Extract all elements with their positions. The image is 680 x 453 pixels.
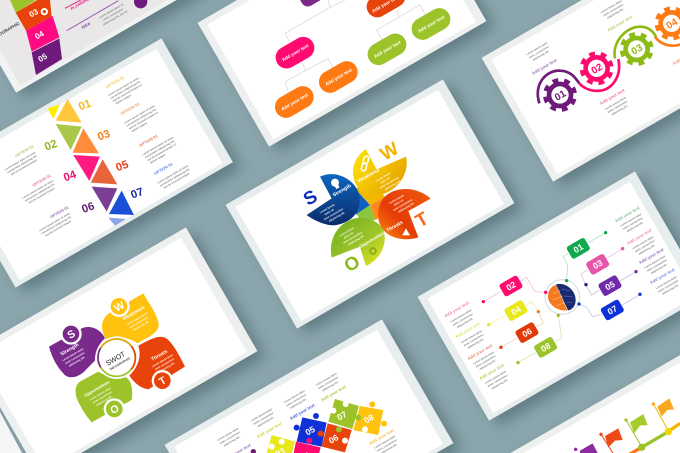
triangles chart: sed do eiusmod tempor [28,186,55,205]
SWOT four-lobe chart: Lorem ipsum dolor [61,347,84,362]
triangles chart: sed do eiusmod tempor ut [128,110,159,131]
org chart: Add your text [280,92,309,112]
center circle: INFOGRAPHIC [109,356,132,371]
lobe: weakness [102,293,159,343]
gears chain: Add your text [531,57,558,76]
SWOT four-lobe chart: amet consectetur [92,390,113,404]
panel: brain mind-map slide [418,169,680,429]
triangles chart: Lorem ipsum dolor sit amet, [21,178,54,200]
brain mind map: Add your text [626,227,653,246]
brain mind map: Lorem ipsum dolor [484,369,507,385]
badge W: W [112,299,128,315]
SWOT flower chart: amet consectetur [392,197,413,212]
triangles chart [4,74,193,239]
triangles chart: OPTION 03 [120,101,141,116]
panel: flags timeline slide [506,328,680,453]
brain mind map: Add your text [467,343,494,361]
letter O: O [340,251,363,276]
puzzle chart: 08 [362,412,376,425]
org chart: Add your text [281,43,310,62]
SWOT four-lobe chart: adipiscing elit, [157,361,176,374]
brain mind map: adipiscing elit, [491,378,509,390]
gears chain: amet, consectetur [607,99,628,114]
SWOT flower chart: Lorem ipsum [319,202,336,214]
ribbon graphic: Lorem ipsum dolor sit [98,2,124,20]
SWOT four-lobe chart: Weakness [122,305,146,322]
panel: center SWOT flower slide [226,77,523,337]
brain mind map: Add your text [443,300,470,318]
puzzle chart: Lorem ipsum dolor [373,434,396,450]
SWOT flower chart: amet consectetur [323,207,344,221]
brain mind map: amet, consectetur [463,332,484,347]
ribbon graphic: amet, consectetur [102,7,124,22]
triangles chart: Lorem ipsum dolor sit amet, [4,150,37,171]
SWOT four-lobe chart: amet consectetur [128,315,149,329]
icon: opportunity circle [370,248,376,254]
triangles chart: Lorem ipsum dolor sit amet, [141,135,174,156]
brain mind map: Lorem ipsum dolor [643,254,666,270]
triangles chart: sed do eiusmod tempor ut [112,83,143,103]
badge 06 [515,321,539,344]
triangles chart: sed do eiusmod tempor ut [146,142,177,162]
brain mind map: Lorem ipsum dolor [631,235,654,250]
SWOT four-lobe chart: Lorem ipsum dolor [151,353,174,368]
gears chain: adipiscing elit, [532,49,550,62]
puzzle chart: adipiscing elit, [223,435,241,447]
triangles chart: Lorem ipsum dolor sit amet, [107,76,140,97]
brain mind map: Lorem ipsum dolor [449,308,472,324]
SWOT flower chart: dolor sit [324,208,335,216]
badge 08 [533,336,558,359]
brain mind map: adipiscing elit, [661,283,679,296]
triangles chart: dolore magna [115,93,132,105]
badge 03 [585,253,610,276]
brain mind map [443,205,680,392]
flag orange [657,398,674,417]
SWOT flower chart: adipiscing elit [347,234,365,246]
panel: triangles options slide [0,36,242,296]
triangles chart: OPTION 01 [153,161,174,176]
petal: strength [307,174,360,225]
flag green [630,414,648,433]
petal: threats [378,189,431,239]
badge 05 [598,274,622,297]
gear 03 [616,29,657,69]
triangles chart: OPTION 01 [31,173,53,188]
SWOT flower chart: dolor sit [393,198,404,207]
gears chain: adipiscing elit, [606,7,624,20]
badge T: T [157,374,169,388]
panel: org chart slide [198,0,495,155]
brain mind map: amet, consectetur [634,239,656,253]
brain mind map: amet, consectetur [452,312,474,327]
triangles chart: OPTION 01 [14,143,35,158]
brain mind map: Add your text [614,205,641,224]
triangles chart: consectetur adipiscing elit, [24,182,56,203]
triangles chart: dolore magna [131,121,148,133]
triangles chart: OPTION 01 [105,74,126,89]
gears chain: Lorem ipsum dolor [525,41,548,56]
brain mind map: Lorem ipsum dolor [460,329,483,344]
org chart: Add your text [417,14,446,34]
gears chain: adipiscing elit, [610,104,629,116]
SWOT four-lobe chart: adipiscing elit, [68,355,86,368]
brain mind map: Add your text [478,362,505,381]
gears chain: amet, consectetur [528,45,550,59]
puzzle chart: adipiscing elit, [321,380,339,392]
badge 01 [566,237,591,260]
lobe: threats [129,337,185,389]
gear 02 [576,48,617,89]
badge 07: 07 [606,303,619,317]
SWOT four-lobe chart: Opportunities [83,379,111,398]
puzzle chart: amet, consectetur [253,411,274,426]
brain mind map: amet, consectetur [657,279,679,293]
brain mind map: adipiscing elit, [479,358,497,371]
puzzle chart: adipiscing elit, [256,415,275,428]
brain mind map: adipiscing elit, [650,262,668,275]
letter S: S [299,185,321,210]
puzzle chart: amet, consectetur [376,438,398,453]
org chart: Add your text [373,39,402,59]
gears chain: Lorem ipsum dolor [600,0,623,14]
puzzle chart: Lorem ipsum dolor [216,426,239,442]
SWOT flower chart: amet consectetur [379,175,400,190]
panel: SWOT infographic slide [0,225,266,453]
flag purple [580,443,598,453]
triangles chart: Lorem ipsum dolor sit amet, [38,211,71,232]
brain mind map: Lorem ipsum dolor [619,212,642,228]
brain mind map: amet, consectetur [475,354,496,369]
org chart [271,0,454,122]
SWOT four-lobe chart: Lorem ipsum dolor [89,386,112,402]
SWOT flower chart: adipiscing elit [397,201,415,214]
brain mind map: Add your text [454,321,481,339]
puzzle chart: Add your text [289,402,316,421]
brain mind map: adipiscing elit, [467,337,485,350]
SWOT flower chart: adipiscing elit [328,211,345,223]
SWOT flower chart: amet consectetur [342,230,363,245]
puzzle chart: Add your text [368,427,395,446]
triangles chart: consectetur adipiscing elit, [144,139,176,159]
triangles chart: 05 [114,159,130,174]
lobe: strength [49,327,105,377]
brain mind map: adipiscing elit, [456,316,474,329]
SWOT four-lobe chart: amet consectetur [64,351,85,365]
badge 01: 01 [572,241,585,255]
triangles chart: OPTION 01 [49,204,70,219]
SWOT flower chart: Lorem ipsum [388,193,405,205]
brain mind map: amet, consectetur [622,216,644,231]
triangles chart: 03 [96,128,112,144]
ribbon graphic: 05 [37,51,49,64]
puzzle chart: Add your text [256,421,283,439]
letter T: T [412,207,432,231]
gear 01: 01 [553,88,569,104]
triangles chart: consectetur adipiscing elit, [40,215,72,235]
SWOT flower chart: Threats [386,220,404,234]
triangles chart: 04 [62,168,79,184]
SWOT flower chart: Opportunities [358,230,386,249]
gear 04: 04 [665,17,680,32]
puzzle chart: Add your text [320,384,347,403]
badge 04: 04 [509,304,523,317]
SWOT flower chart: adipiscing elit [384,179,401,191]
puzzle chart: Lorem ipsum dolor [315,371,338,387]
gear 02: 02 [590,62,605,77]
gears chain [525,0,680,118]
panel: ribbon infographic slide [0,0,242,101]
gear 04 [651,3,680,44]
SWOT four-lobe chart: Threats [150,349,169,363]
SWOT flower chart: Strength [332,183,353,199]
badge 08: 08 [539,340,552,354]
petal: opportunities [331,218,385,266]
triangles chart: consectetur adipiscing elit, [125,107,157,128]
icon: warning triangle [402,228,410,235]
puzzle chart: 05 [303,424,317,437]
brain mind map: adipiscing elit, [626,220,644,233]
gears chain: Lorem ipsum dolor [604,95,627,111]
brain mind map: Lorem ipsum dolor [655,275,678,290]
triangles chart: OPTION 01 [138,133,159,148]
puzzle chart: amet, consectetur [285,393,307,407]
SWOT four-lobe chart [49,293,185,422]
gears chain: amet, consectetur [602,3,624,17]
badge 06: 06 [520,326,534,339]
SWOT four-lobe chart: adipiscing elit, [132,319,150,332]
ribbon graphic: 04 [33,29,46,41]
SWOT flower chart: Lorem ipsum [375,171,392,183]
SWOT four-lobe chart: Lorem ipsum dolor [125,311,148,327]
badge 03: 03 [591,257,604,271]
brain mind map: Add your text [649,267,676,285]
puzzle chart: 06 [327,432,340,446]
puzzle chart: amet, consectetur [317,375,339,390]
panel: gears process slide [482,0,680,190]
badge 07 [600,299,625,321]
puzzle chart: Lorem ipsum dolor [250,407,273,423]
SWOT four-lobe chart: Strength [59,342,80,358]
badge 02: 02 [504,279,518,293]
badge O: O [108,402,121,417]
brain icon [548,284,576,310]
SWOT flower chart: Weakness [357,167,381,184]
badge 05: 05 [603,279,617,292]
brain mind map: Lorem ipsum dolor [472,350,495,366]
panel: puzzle slide [165,317,462,453]
lobe: opportunities [76,372,132,422]
brain mind map: Add your text [638,247,665,265]
SWOT flower chart [299,137,432,276]
puzzle chart: 07 [335,409,349,422]
flags timeline [574,398,680,453]
org chart: Add your text [324,67,353,87]
ribbon graphic [0,0,147,75]
ribbon graphic: adipiscing elit, sed do [102,9,128,26]
triangles chart: sed do eiusmod tempor [10,158,38,176]
triangles chart: dolore magna [149,152,167,165]
SWOT flower chart: dolor sit [343,231,354,240]
center circle: SWOT [105,351,127,368]
triangles chart: sed do eiusmod tempor [44,219,72,237]
triangles chart: 07 [129,186,145,202]
petal: weakness [353,149,407,195]
triangles chart: sed do eiusmod tempor [163,171,190,190]
triangles chart: Lorem ipsum dolor sit amet, [156,163,189,185]
gear 01 [540,75,580,115]
triangles chart: 01 [77,98,93,113]
puzzle chart: Lorem ipsum dolor [283,389,306,404]
triangles chart: 06 [80,200,96,216]
icon: idea head [331,179,340,189]
triangles chart: consectetur adipiscing elit, [6,154,38,174]
SWOT four-lobe chart: adipiscing elit, [95,394,113,407]
gear 03: 03 [630,42,645,58]
triangles chart: consectetur adipiscing elit, [109,79,141,100]
triangles chart: Lorem ipsum dolor sit amet, [123,103,156,125]
puzzle chart: amet, consectetur [219,430,241,445]
brain mind map: amet, consectetur [487,373,508,388]
gears chain: Add your text [599,87,626,106]
flag red [605,428,623,447]
triangles chart: consectetur adipiscing elit, [159,167,191,188]
SWOT flower chart: Lorem ipsum [338,226,355,238]
puzzle chart [216,371,400,453]
puzzle chart: adipiscing elit, [289,397,307,410]
center circle [95,336,138,379]
ribbon graphic: IDEA [81,21,91,30]
icon: chain link [361,156,369,171]
badge 02 [499,275,523,297]
ribbon graphic: 03 [28,7,40,19]
triangles chart: 02 [43,138,59,154]
brain mind map: adipiscing elit, [638,243,656,256]
panel: bottom-left slide corner [0,412,22,453]
SWOT flower chart: dolor sit [380,176,391,185]
letter W: W [376,137,402,165]
brain mind map: amet, consectetur [646,258,668,273]
SWOT four-lobe chart: amet consectetur [154,357,175,371]
gears chain: Add your text [607,14,634,33]
badge S: S [65,328,78,342]
badge 04 [504,299,528,322]
